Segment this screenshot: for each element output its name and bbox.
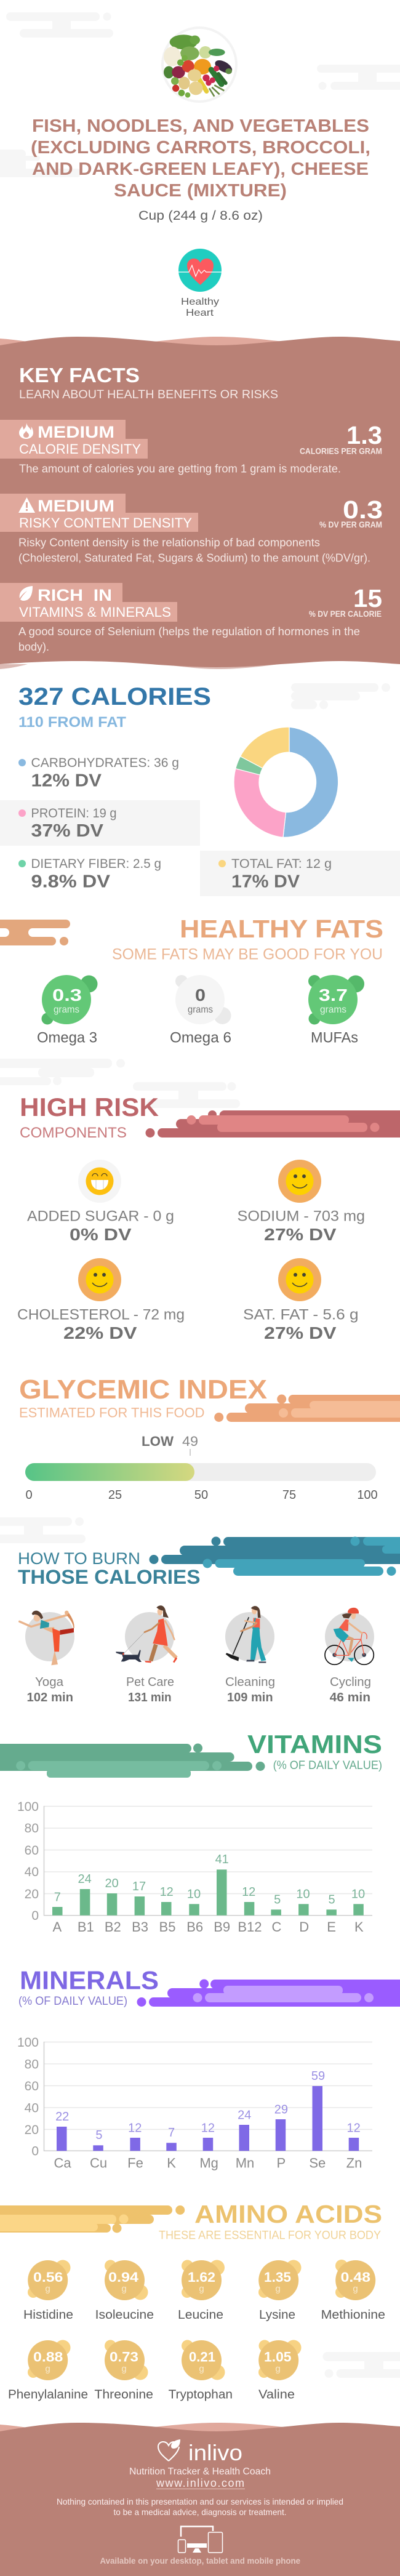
amino: valine <box>258 2340 302 2402</box>
title <box>31 116 370 201</box>
bar chart: minerals: Zn <box>346 2156 362 2171</box>
bar chart: vitamins: 100 <box>17 1800 39 1814</box>
amino: isoleucine: 0.94 <box>108 2269 139 2285</box>
macro: total fat <box>218 857 332 891</box>
macro: carbohydrates: 12% DV <box>31 771 102 790</box>
heading: glycemic index <box>19 1374 267 1421</box>
risk: sodium: SODIUM - 703 mg <box>238 1208 365 1225</box>
bar chart: vitamins: K <box>354 1919 364 1935</box>
heading: key facts: LEARN ABOUT HEALTH BENEFITS OR RISKS <box>19 388 278 401</box>
amino: leucine <box>178 2260 225 2322</box>
bar chart: minerals: 100 <box>17 2036 39 2050</box>
heading: high risk: HIGH RISK <box>20 1093 159 1121</box>
bar chart: minerals: 22 <box>55 2110 69 2124</box>
disclaimer <box>57 2497 343 2517</box>
bar chart: minerals: P <box>277 2156 286 2171</box>
panel: footer <box>0 2423 400 2576</box>
bar chart: vitamins: E <box>327 1919 336 1935</box>
bar chart: minerals: 59 <box>311 2069 325 2083</box>
amino: histidine: Histidine <box>23 2308 73 2322</box>
gauge: glycemic value: 50 <box>194 1488 208 1502</box>
macro: total fat: TOTAL FAT: 12 g <box>231 857 332 871</box>
heading: healthy fats: HEALTHY FATS <box>180 915 383 943</box>
bar chart: vitamins: 12 <box>242 1885 255 1899</box>
bar chart: vitamins <box>17 1800 372 1935</box>
bar chart: vitamins: 80 <box>25 1821 39 1836</box>
amino: isoleucine <box>95 2260 154 2322</box>
fat: omega 3: 0.3 <box>52 985 82 1005</box>
bar chart: minerals: 24 <box>238 2108 251 2122</box>
activity: cleaning <box>225 1606 275 1704</box>
icon: yoga figure <box>20 1611 74 1665</box>
heading: amino acids: AMINO ACIDS <box>194 2200 382 2228</box>
bar chart: minerals: 29 <box>274 2103 288 2116</box>
risk: added sugar: ADDED SUGAR - 0 g <box>27 1208 174 1225</box>
decor: teal stripes <box>149 1536 400 1576</box>
amino: leucine: 1.62 <box>188 2269 215 2285</box>
heading: calories: 110 FROM FAT <box>18 714 126 731</box>
label: healthy heart: Healthy <box>181 297 219 307</box>
amino: histidine: 0.56 <box>33 2269 63 2285</box>
card: risky content density: RISKY CONTENT DENSITY <box>19 515 192 531</box>
card: risky content density: (Cholesterol, Saturated Fat, Sugars & Sodium) to the amount (%DV/gr). <box>18 552 370 564</box>
disclaimer: to be a medical advice, diagnosis or treatment. <box>113 2507 287 2517</box>
amino: lysine: Lysine <box>259 2308 295 2322</box>
bar chart: vitamins: 20 <box>25 1887 39 1901</box>
bar chart: minerals: 40 <box>25 2101 39 2116</box>
fat: MUFAs: grams <box>320 1005 346 1015</box>
amino: tryptophan: g <box>199 2364 204 2374</box>
bar chart: vitamins: 10 <box>296 1887 310 1901</box>
icon: warning triangle <box>18 497 35 513</box>
card: risky content density: % DV PER GRAM <box>319 520 382 529</box>
activity: cleaning: 109 min <box>227 1691 273 1704</box>
risk: cholesterol <box>17 1258 185 1342</box>
bar chart: minerals: 12 <box>128 2121 142 2135</box>
amino: lysine: 1.35 <box>264 2269 291 2285</box>
bar chart: vitamins: 40 <box>25 1865 39 1879</box>
bar chart: minerals: Fe <box>127 2156 143 2171</box>
bar chart: minerals: 80 <box>25 2058 39 2072</box>
heading: minerals: (% OF DAILY VALUE) <box>18 1995 127 2008</box>
icon: healthy heart <box>178 249 222 292</box>
bar chart: minerals: Ca <box>54 2156 71 2171</box>
bar chart: vitamins: 60 <box>25 1844 39 1858</box>
bar chart: vitamins: 7 <box>54 1890 61 1904</box>
bar chart: minerals: 12 <box>346 2121 361 2135</box>
heading: burn calories: THOSE CALORIES <box>18 1566 201 1588</box>
title: SAUCE (MIXTURE) <box>114 181 287 201</box>
heading: key facts: KEY FACTS <box>19 364 140 387</box>
macro: protein <box>18 806 117 841</box>
bar chart: vitamins: 0 <box>31 1909 39 1923</box>
panel: high risk components <box>0 1059 400 1342</box>
heading: high risk <box>20 1093 159 1141</box>
bar chart: vitamins: B6 <box>186 1919 203 1935</box>
card: calorie density: CALORIE DENSITY <box>19 441 141 457</box>
food image: vegetables <box>162 28 236 102</box>
bar chart: vitamins: B1 <box>78 1919 94 1935</box>
macro: carbohydrates <box>18 756 179 790</box>
donut chart: calorie split <box>234 727 338 837</box>
activity: yoga: 102 min <box>27 1691 73 1704</box>
fat: omega 3 <box>37 975 97 1046</box>
amino: methionine: Methionine <box>321 2308 385 2322</box>
amino: methionine <box>321 2260 385 2322</box>
bar chart: vitamins: 41 <box>215 1853 229 1866</box>
bar chart: vitamins: 17 <box>132 1880 146 1893</box>
bar chart: minerals: 0 <box>31 2145 39 2159</box>
heading: glycemic index: GLYCEMIC INDEX <box>19 1374 267 1405</box>
amino: threonine: Threonine <box>94 2388 153 2402</box>
title: (EXCLUDING CARROTS, BROCCOLI, <box>31 138 370 158</box>
risk: sodium <box>238 1160 365 1244</box>
amino: threonine: g <box>121 2364 127 2374</box>
activity: pet care: Pet Care <box>126 1675 174 1689</box>
title: AND DARK-GREEN LEAFY), CHEESE <box>32 159 369 179</box>
panel: how to burn those calories <box>0 1517 400 1704</box>
gauge: glycemic value: 49 <box>182 1434 198 1449</box>
amino: valine: g <box>275 2364 281 2374</box>
label: healthy heart: Heart <box>186 308 214 318</box>
gauge: glycemic value: 100 <box>357 1488 378 1502</box>
decor: orange stripes <box>214 1395 400 1422</box>
bar chart: vitamins: 5 <box>274 1893 281 1906</box>
bar chart: minerals: 5 <box>95 2129 102 2142</box>
tagline: Nutrition Tracker & Health Coach <box>129 2466 271 2477</box>
risk: added sugar: 0% DV <box>70 1225 132 1244</box>
macro: dietary fiber: DIETARY FIBER: 2.5 g <box>31 857 161 871</box>
card: risky content density <box>0 494 383 564</box>
gauge: glycemic value: LOW <box>142 1434 174 1449</box>
bar chart: minerals: 60 <box>25 2079 39 2093</box>
heading: healthy fats: SOME FATS MAY BE GOOD FOR YOU <box>112 945 383 963</box>
macro: carbohydrates: CARBOHYDRATES: 36 g <box>31 756 179 770</box>
amino: threonine: 0.73 <box>110 2349 138 2365</box>
bar chart: minerals: 20 <box>25 2123 39 2137</box>
activity: cleaning: Cleaning <box>225 1675 275 1689</box>
heading: vitamins: (% OF DAILY VALUE) <box>273 1759 382 1772</box>
card: risky content density: Risky Content density is the relationship of bad components <box>18 537 320 549</box>
amino: phenylalanine: Phenylalanine <box>8 2388 88 2402</box>
amino: isoleucine: g <box>121 2284 127 2294</box>
bar chart: vitamins: B2 <box>105 1919 121 1935</box>
label: healthy heart <box>181 297 219 318</box>
activity: pet care: 131 min <box>128 1691 172 1704</box>
bar chart: vitamins: 20 <box>105 1877 119 1890</box>
amino: leucine: Leucine <box>178 2308 223 2322</box>
amino: methionine: 0.48 <box>341 2269 370 2285</box>
bar chart: vitamins: B12 <box>238 1919 262 1935</box>
macro: dietary fiber: 9.8% DV <box>31 872 111 891</box>
fat: MUFAs <box>308 975 364 1046</box>
fat: MUFAs: 3.7 <box>319 985 348 1005</box>
activity: pet care <box>116 1605 177 1704</box>
amino: valine: Valine <box>258 2388 295 2402</box>
gauge: glycemic value <box>25 1434 378 1502</box>
amino: phenylalanine <box>8 2340 88 2402</box>
heading: amino acids: THESE ARE ESSENTIAL FOR YOUR BODY <box>159 2229 381 2242</box>
bar chart: vitamins: B3 <box>132 1919 148 1935</box>
risk: saturated fat <box>243 1258 358 1342</box>
card: calorie density: 1.3 <box>346 421 382 449</box>
fat: omega 6: grams <box>188 1005 213 1015</box>
heading: minerals: MINERALS <box>20 1966 159 1995</box>
fat: omega 6: 0 <box>195 985 206 1005</box>
amino: tryptophan: Tryptophan <box>169 2388 233 2402</box>
card: calorie density: The amount of calories you are getting from 1 gram is moderate. <box>19 463 341 475</box>
amino: histidine <box>23 2260 73 2322</box>
bar chart: vitamins: A <box>53 1919 62 1935</box>
bar chart: minerals: Mg <box>199 2156 218 2171</box>
bar chart: minerals: Cu <box>90 2156 107 2171</box>
activity: yoga <box>20 1611 74 1704</box>
activity: cycling: 46 min <box>330 1691 370 1704</box>
heading: calories <box>18 683 211 731</box>
fat: omega 6: Omega 6 <box>170 1029 231 1046</box>
macro: protein: PROTEIN: 19 g <box>31 806 117 821</box>
heading: vitamins: VITAMINS <box>247 1730 382 1759</box>
gauge: glycemic value: 75 <box>282 1488 296 1502</box>
icon: devices <box>178 2526 223 2553</box>
card: calorie density: MEDIUM <box>38 423 114 441</box>
card: vitamins and minerals: body). <box>18 641 49 653</box>
activity: cycling <box>325 1608 374 1704</box>
activity: cycling: Cycling <box>330 1675 371 1689</box>
macro: dietary fiber <box>18 857 161 891</box>
amino: isoleucine: Isoleucine <box>95 2308 154 2322</box>
bar chart: vitamins: B9 <box>214 1919 230 1935</box>
macro: protein: 37% DV <box>31 821 104 841</box>
bar chart: minerals: 12 <box>201 2121 215 2135</box>
risk: sodium: 27% DV <box>264 1225 337 1244</box>
heading: high risk: COMPONENTS <box>20 1125 127 1141</box>
amino: lysine: g <box>275 2284 281 2294</box>
heading: minerals <box>18 1966 159 2008</box>
disclaimer: Nothing contained in this presentation and our services is intended or implied <box>57 2497 343 2506</box>
risk: saturated fat: SAT. FAT - 5.6 g <box>243 1306 358 1323</box>
amino: valine: 1.05 <box>264 2349 292 2365</box>
card: risky content density: MEDIUM <box>38 497 114 515</box>
panel: healthy fats <box>0 915 383 1046</box>
amino: histidine: g <box>45 2284 50 2294</box>
risk: cholesterol: 22% DV <box>63 1323 137 1342</box>
card: vitamins and minerals: 15 <box>353 584 382 612</box>
heading: calories: 327 CALORIES <box>18 683 211 710</box>
card: calorie density <box>0 420 382 475</box>
amino: phenylalanine: g <box>45 2364 50 2374</box>
decor: yellow stripes <box>0 2205 185 2233</box>
heading: burn calories: HOW TO BURN <box>18 1549 140 1568</box>
heading: vitamins <box>247 1730 382 1772</box>
card: vitamins and minerals: A good source of Selenium (helps the regulation of hormones in the <box>18 625 360 638</box>
fat: omega 3: Omega 3 <box>37 1029 97 1046</box>
amino: threonine <box>94 2340 153 2402</box>
gauge: glycemic value: 0 <box>25 1488 33 1502</box>
risk: saturated fat: 27% DV <box>264 1323 337 1342</box>
card: vitamins and minerals: VITAMINS & MINERALS <box>19 604 171 620</box>
serving size: Cup (244 g / 8.6 oz) <box>138 209 263 223</box>
logo: inlivo: inlivo <box>188 2440 242 2465</box>
activity: yoga: Yoga <box>35 1675 64 1689</box>
panel: vitamins <box>0 1730 382 1935</box>
card: risky content density: 0.3 <box>343 496 383 524</box>
gauge: glycemic value: 25 <box>108 1488 122 1502</box>
fat: MUFAs: MUFAs <box>311 1029 358 1046</box>
bar chart: vitamins: D <box>299 1919 309 1935</box>
amino: leucine: g <box>199 2284 204 2294</box>
fat: omega 3: grams <box>54 1005 79 1015</box>
decor: orange stripes <box>0 920 78 945</box>
bar chart: vitamins: C <box>271 1919 281 1935</box>
logo: inlivo <box>158 2439 242 2465</box>
heading: burn calories <box>18 1549 201 1588</box>
bar chart: minerals: 7 <box>168 2126 175 2140</box>
bar chart: minerals: Mn <box>236 2156 254 2171</box>
icon: leaf <box>20 586 33 601</box>
header section <box>0 12 400 318</box>
amino: methionine: g <box>353 2284 358 2294</box>
amino: phenylalanine: 0.88 <box>33 2349 63 2365</box>
icon: woman sweeping <box>225 1606 274 1663</box>
decor: red stripes <box>145 1110 400 1138</box>
card: vitamins and minerals <box>0 583 382 653</box>
panel: glycemic index <box>19 1374 400 1502</box>
card: calorie density: CALORIES PER GRAM <box>300 446 382 455</box>
amino: tryptophan: 0.21 <box>189 2349 215 2365</box>
decor: green stripes <box>0 1743 265 1778</box>
heading: glycemic index: ESTIMATED FOR THIS FOOD <box>19 1405 204 1421</box>
icon: woman cycling <box>325 1608 374 1664</box>
bar chart: vitamins: 12 <box>160 1885 174 1899</box>
title: FISH, NOODLES, AND VEGETABLES <box>32 116 369 136</box>
risk: added sugar <box>27 1160 174 1244</box>
panel: calories <box>0 683 400 896</box>
bar chart: vitamins: 5 <box>328 1893 335 1906</box>
amino: lysine <box>258 2260 302 2322</box>
website link: www.inlivo.com <box>156 2477 244 2489</box>
card: vitamins and minerals: % DV PER CALORIE <box>309 609 382 619</box>
decor: purple stripes <box>137 1980 400 2007</box>
heading: key facts <box>19 364 278 401</box>
panel: key facts <box>0 337 400 669</box>
icon: flame <box>19 423 33 439</box>
bar chart: vitamins: B5 <box>159 1919 175 1935</box>
card: vitamins and minerals: RICH IN <box>38 586 112 604</box>
bar chart: minerals: K <box>167 2156 176 2171</box>
amino: tryptophan <box>169 2340 233 2402</box>
macro: total fat: 17% DV <box>231 872 300 891</box>
availability note: Available on your desktop, tablet and mobile phone <box>100 2556 300 2566</box>
bar chart: minerals <box>17 2036 372 2171</box>
bar chart: vitamins: 24 <box>78 1872 92 1886</box>
bar chart: minerals: Se <box>309 2156 326 2171</box>
icon: woman walking dog <box>116 1605 177 1663</box>
heading: healthy fats <box>112 915 383 963</box>
panel: minerals <box>17 1966 400 2171</box>
heading: amino acids <box>159 2200 382 2242</box>
fat: omega 6 <box>170 975 231 1046</box>
bar chart: vitamins: 10 <box>351 1887 365 1901</box>
risk: cholesterol: CHOLESTEROL - 72 mg <box>17 1306 185 1323</box>
panel: amino acids <box>0 2200 400 2402</box>
bar chart: vitamins: 10 <box>187 1887 201 1901</box>
